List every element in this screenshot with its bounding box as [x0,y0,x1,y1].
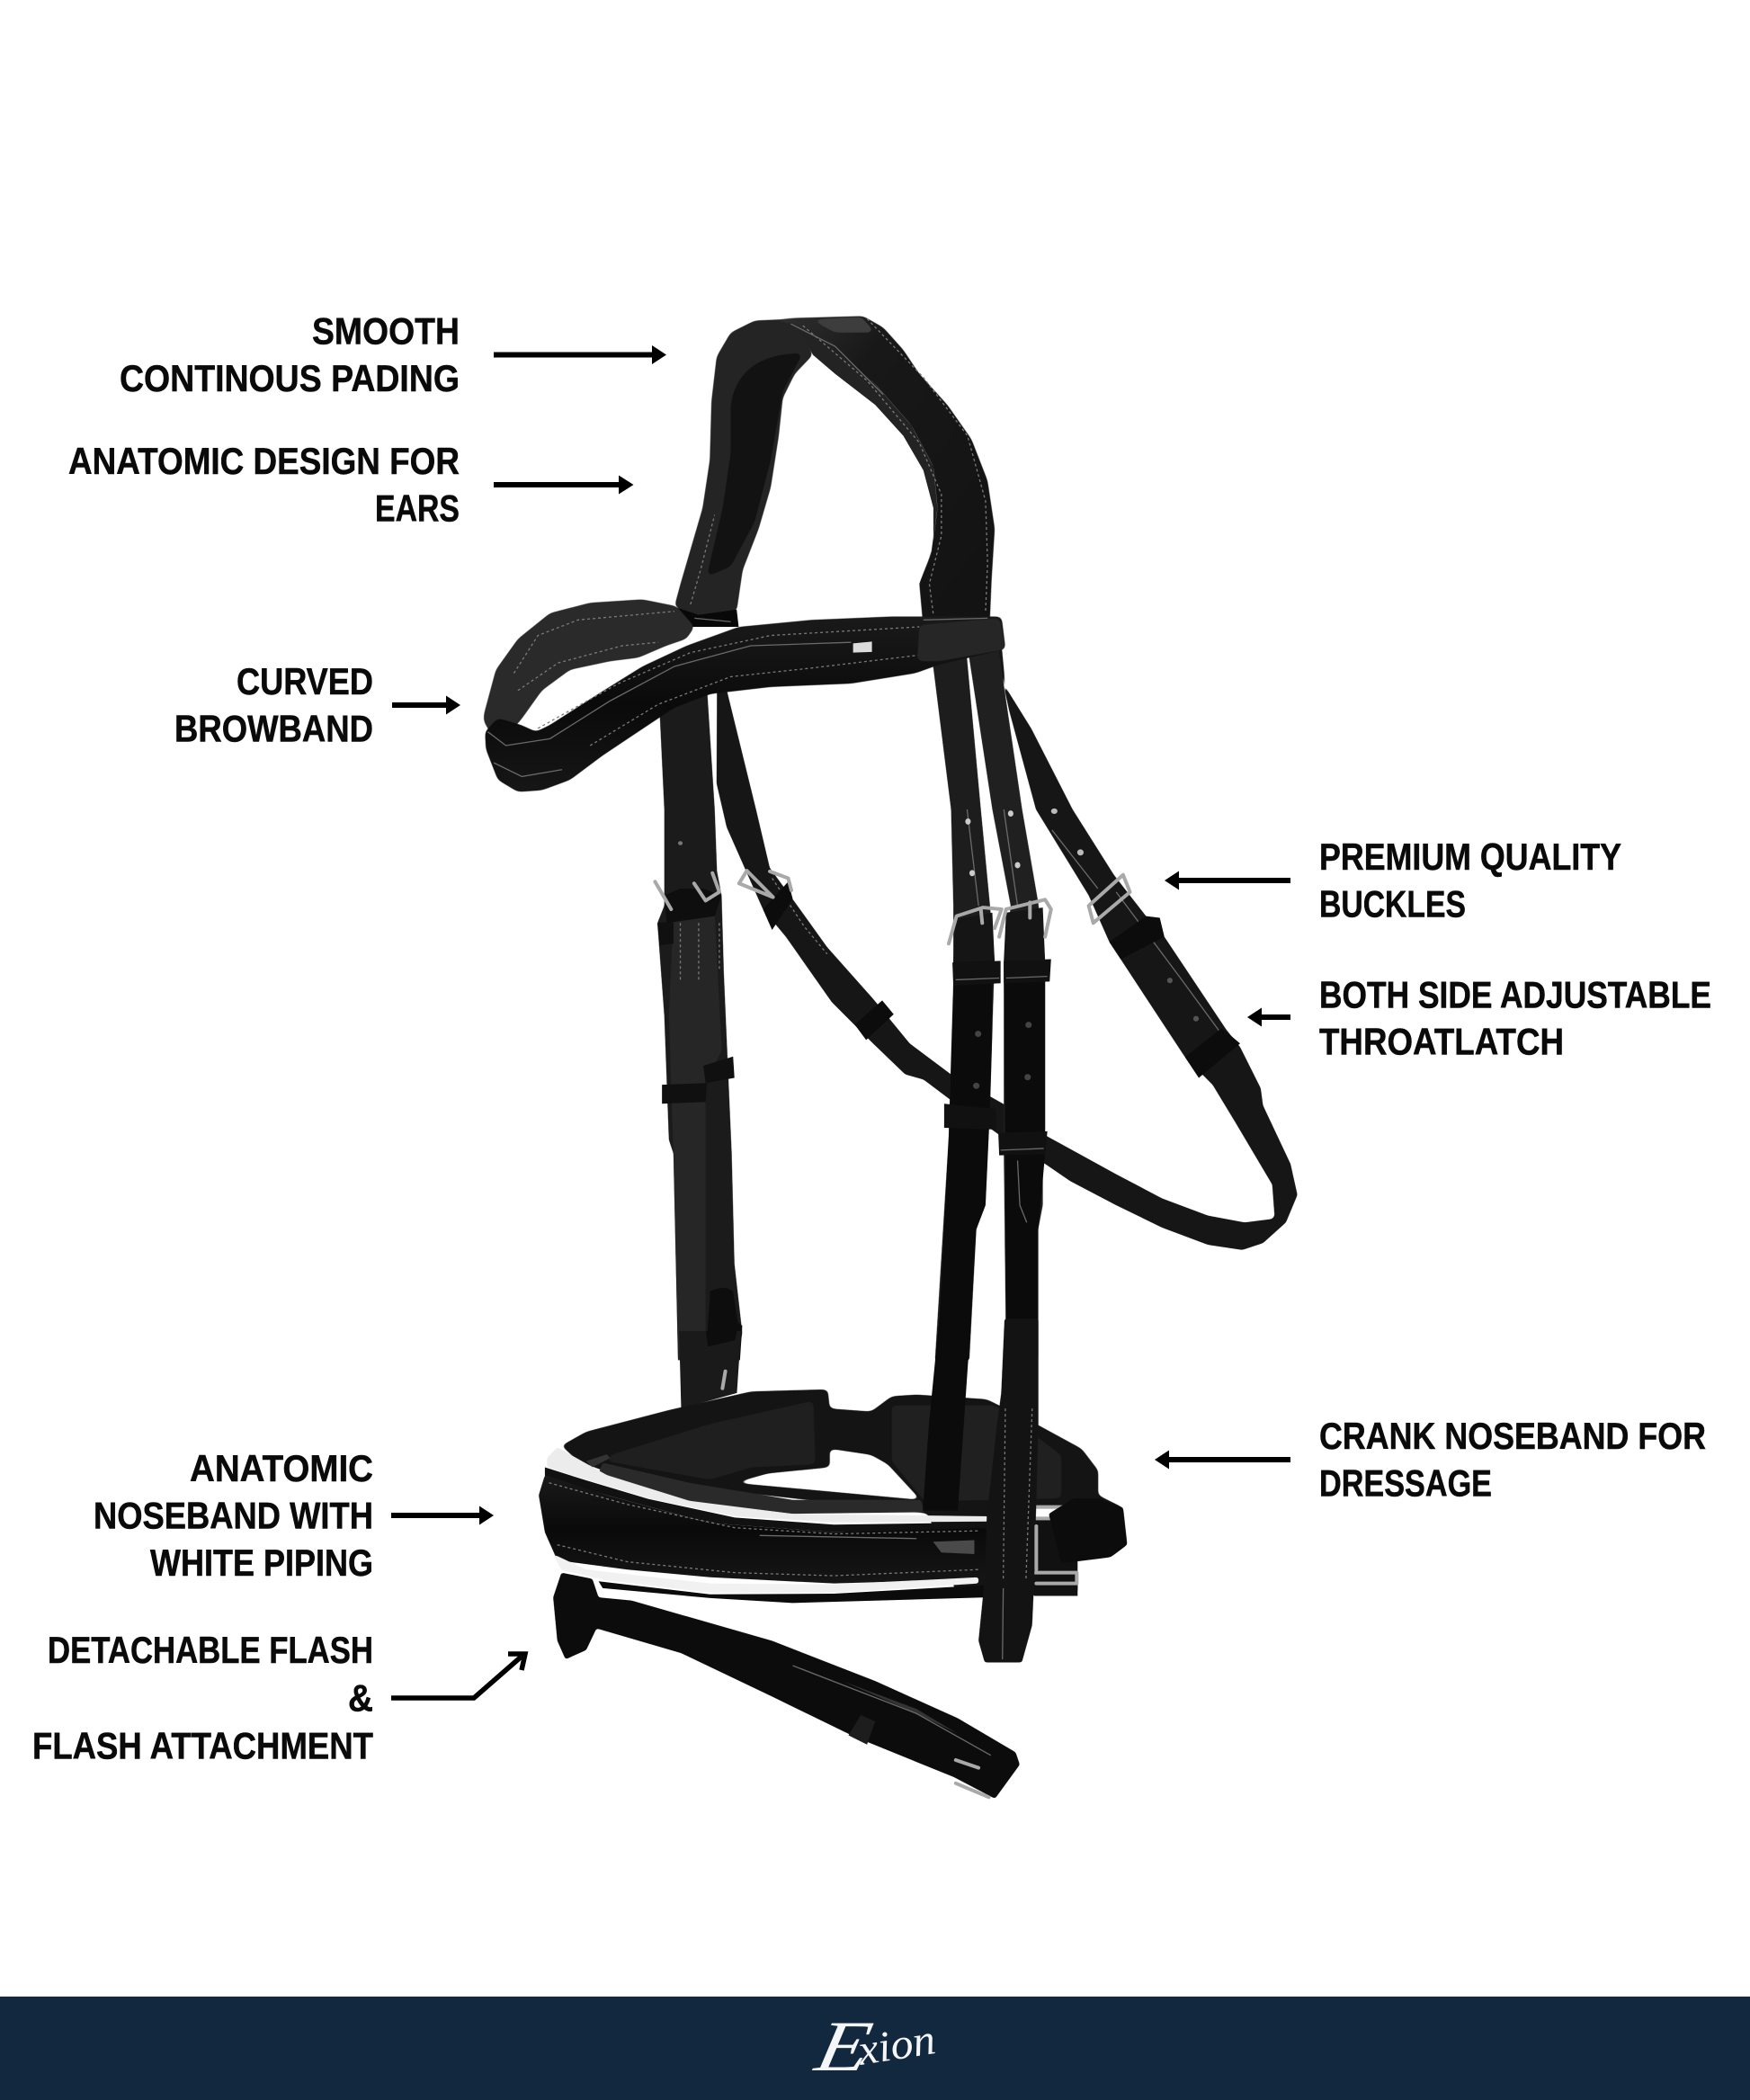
arrow: throatlatch [1247,1007,1290,1027]
logo: Exion [808,2007,939,2087]
label: smooth continous pading: SMOOTH [312,309,460,353]
label: anatomic noseband with white piping: WHITE PIPING [150,1541,373,1584]
label: anatomic noseband with white piping: NOSEBAND WITH [94,1495,373,1536]
crownpiece with padding [673,316,995,629]
inner cheek strap over noseband [923,1318,971,1511]
arrow: crank noseband [1155,1450,1290,1470]
arrow: padding [494,345,666,364]
label: premium quality buckles: PREMIUM QUALITY [1319,836,1621,878]
label: detachable flash and flash attachment: & [348,1676,373,1720]
label: anatomic noseband with white piping: ANATOMIC [190,1447,373,1489]
noseband front with white piping [539,1447,1127,1603]
left cheekpiece [655,665,742,1360]
bridle illustration [484,316,1298,1799]
logo: Exion: E [808,2007,879,2087]
label: anatomic design for ears: EARS [375,487,460,529]
arrow: browband [392,696,460,714]
outer cheek strap loop [978,1318,1039,1663]
label: curved browband: BROWBAND [174,707,373,750]
throatlatch strap [717,644,1298,1250]
label: both side adjustable throatlatch: THROATLATCH [1319,1020,1564,1063]
label: anatomic design for ears: ANATOMIC DESIGN FOR [68,440,460,482]
label: smooth continous pading: CONTINOUS PADING [120,357,460,399]
arrow: flash [391,1654,525,1698]
centre cheek straps with buckles [931,644,1051,1360]
arrow: noseband [391,1506,494,1525]
label: curved browband: CURVED [237,660,373,702]
arrow: buckles [1165,871,1290,890]
label: detachable flash and flash attachment: FLASH ATTACHMENT [32,1725,373,1766]
detachable flash strap [553,1573,1020,1799]
curved browband [484,599,1005,792]
footer band [0,1997,1750,2100]
logo: Exion: xion [853,2015,939,2075]
noseband padding [561,1331,1127,1597]
label: premium quality buckles: BUCKLES [1319,883,1466,925]
label: detachable flash and flash attachment: DETACHABLE FLASH [48,1629,373,1671]
label: crank noseband for dressage: DRESSAGE [1319,1462,1492,1504]
arrow: ears [494,475,633,495]
